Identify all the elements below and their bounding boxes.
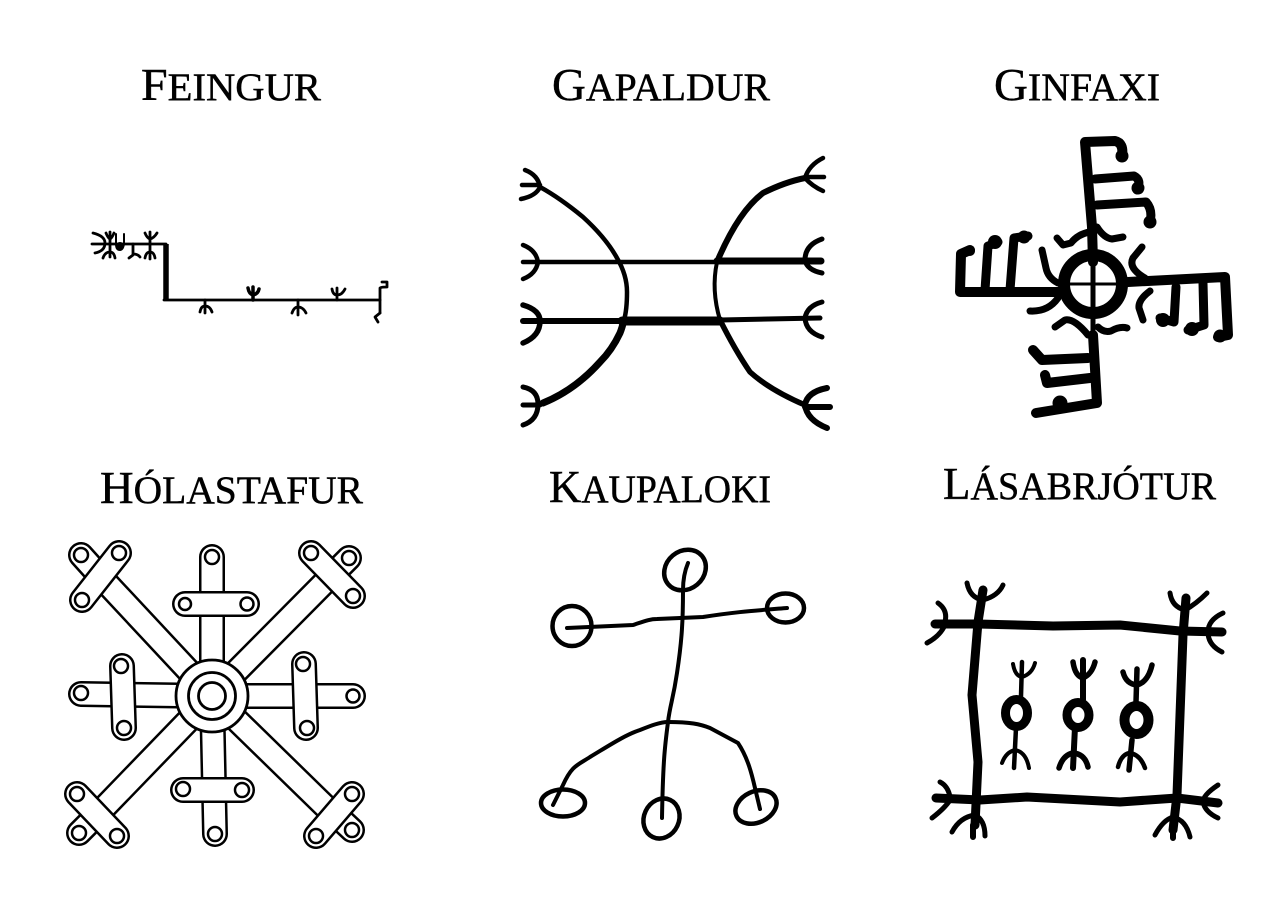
symbol: Lásabrjótur stave bbox=[927, 583, 1223, 838]
right foot bbox=[730, 784, 782, 830]
left arm bbox=[960, 250, 1060, 292]
head bbox=[656, 541, 714, 599]
upper horizontal bbox=[523, 260, 717, 264]
frame bbox=[935, 624, 1222, 632]
right hand bbox=[767, 594, 804, 622]
left upper arc bbox=[540, 187, 627, 320]
title: Gapaldur: GAPALDUR bbox=[552, 59, 770, 110]
right upper arc bbox=[717, 178, 805, 262]
title: Lásabrjótur: LÁSABRJÓTUR bbox=[943, 458, 1216, 509]
left lower arc bbox=[543, 320, 624, 403]
right arm bbox=[1128, 277, 1228, 337]
title: Ginfaxi: GINFAXI bbox=[994, 59, 1160, 110]
lower horizontal bbox=[523, 318, 622, 324]
centre wheel bbox=[1064, 255, 1122, 313]
right middle arc bbox=[715, 262, 720, 320]
title: Kaupaloki: KAUPALOKI bbox=[549, 461, 771, 512]
title: Feingur: FEINGUR bbox=[141, 59, 321, 110]
inner figure 1 bbox=[1002, 662, 1035, 768]
title: Hólastafur: HÓLASTAFUR bbox=[100, 462, 363, 513]
inner figure 2 bbox=[1059, 660, 1095, 768]
arms bbox=[567, 608, 787, 628]
legs bbox=[553, 722, 760, 809]
corner under bars bbox=[79, 555, 352, 833]
spine bbox=[662, 563, 688, 818]
inner figure 3 bbox=[1118, 665, 1152, 770]
bottom arm bbox=[1036, 335, 1097, 413]
cross bars bbox=[77, 553, 353, 836]
centre rings bbox=[176, 660, 248, 732]
symbol: Kaupaloki stave bbox=[541, 541, 804, 844]
forks bbox=[521, 170, 540, 199]
left hand bbox=[552, 606, 592, 646]
symbol: Gapaldur stave bbox=[521, 158, 830, 428]
spokes bbox=[81, 557, 353, 834]
centre foot bbox=[637, 793, 686, 844]
symbol: Feingur stave bbox=[92, 232, 387, 322]
rivet holes bbox=[70, 546, 360, 843]
left foot bbox=[541, 790, 585, 816]
symbol: Ginfaxi stave bbox=[960, 141, 1228, 413]
symbol: Hólastafur stave bbox=[70, 546, 360, 843]
right lower arc bbox=[720, 320, 805, 405]
top arm bbox=[1085, 141, 1122, 262]
corner forks bbox=[927, 583, 1223, 838]
small hooks around the wheel bbox=[1057, 232, 1090, 245]
